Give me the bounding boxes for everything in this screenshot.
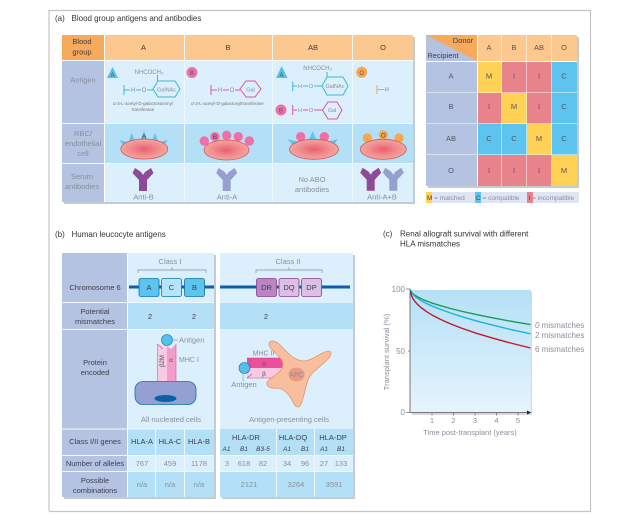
- curve: 6 mismatches: [410, 291, 530, 348]
- column headers: [141, 43, 386, 52]
- class II genes row: A1: [319, 446, 328, 453]
- antigen AB structure: A: [279, 73, 284, 79]
- row headers: antibodies: [65, 182, 99, 191]
- antibodies: Anti-A: [217, 192, 237, 202]
- axis labels: Time post-transplant (years): [423, 428, 517, 437]
- antigen AB structure: H: [298, 108, 302, 114]
- row headers: group: [72, 48, 92, 56]
- curve labels: 6 mismatches: [535, 345, 584, 354]
- rbc A: [119, 131, 168, 159]
- MHC I on nucleated cell: Antigen: [179, 336, 204, 344]
- antigen B structure: O: [230, 88, 235, 94]
- panel: compatibility matrix: C: [561, 102, 567, 111]
- panel a: blood group table: [62, 35, 415, 204]
- chromosome class II: Class II: [275, 257, 301, 266]
- class I genes row: [131, 437, 210, 489]
- class II genes row: 3: [225, 459, 229, 468]
- class I genes row: 459: [164, 459, 176, 468]
- row labels: Number of alleles: [66, 459, 124, 468]
- matrix legend: M = matched: [427, 195, 465, 202]
- rbc AB: [288, 131, 338, 159]
- chromosome class I: B: [192, 283, 197, 292]
- panel: compatibility matrix: I: [538, 72, 540, 80]
- class I genes row: 1178: [191, 459, 207, 468]
- class II genes row: B3-5: [256, 446, 270, 453]
- class II genes row: 618: [238, 459, 250, 468]
- axis labels: [382, 285, 520, 437]
- panel b: class I table: 2: [148, 312, 152, 321]
- row headers: RBC/: [74, 129, 93, 138]
- axis labels: 3: [473, 416, 477, 425]
- panel c heading: HLA mismatches: [400, 240, 460, 248]
- class II genes row: B1: [337, 446, 345, 453]
- matrix legend: I = incompatible: [528, 195, 575, 202]
- class II genes row: 3264: [288, 480, 304, 489]
- class II genes row: 34: [283, 459, 291, 468]
- row labels: Potential: [80, 307, 110, 316]
- axis labels: 100: [392, 285, 406, 294]
- class I genes row: n/a: [137, 480, 148, 489]
- curve: 0 mismatches: [410, 290, 530, 325]
- matrix corner: Recipient: [427, 51, 460, 60]
- panel: compatibility matrix: I: [538, 102, 540, 111]
- panel: compatibility matrix: M: [511, 102, 517, 111]
- chromosome class II: DR: [261, 283, 272, 292]
- rbc O: O: [381, 134, 386, 140]
- MHC I on nucleated cell: All nucleated cells: [141, 415, 201, 424]
- antigen B structure: B: [190, 71, 194, 77]
- antigen B structure: α-3-L-acetyl-D-galactosyltransferase: [191, 101, 264, 106]
- row headers: Serum: [71, 172, 93, 181]
- panel: compatibility matrix: B: [448, 102, 454, 111]
- class II genes row: HLA-DP: [319, 433, 347, 442]
- row headers: cell: [77, 149, 89, 158]
- axis labels: 4: [494, 416, 499, 425]
- chromosome class I: C: [169, 283, 175, 292]
- row labels: Protein: [83, 358, 107, 367]
- MHC II on antigen-presenting cell: [231, 341, 331, 424]
- matrix corner: [426, 35, 477, 61]
- panel a heading: Blood group antigens and antibodies: [72, 14, 201, 23]
- class II genes row: B1: [240, 446, 248, 453]
- chromosome class II: [220, 257, 350, 296]
- antigen A structure: [107, 67, 180, 112]
- antigen B structure: [186, 67, 264, 106]
- antigen B structure: H: [218, 88, 222, 94]
- panel: compatibility matrix: M: [536, 134, 542, 143]
- matrix corner: Donor: [453, 36, 474, 45]
- panel b: class II table: [220, 253, 355, 499]
- antigen AB structure: O: [309, 108, 314, 114]
- panel: compatibility matrix: A: [486, 43, 492, 52]
- antigen AB structure: O: [309, 84, 314, 90]
- antibodies: No ABO: [298, 175, 326, 184]
- class II genes row: 133: [335, 459, 347, 468]
- antigen A structure: NHCOCH₃: [135, 70, 164, 76]
- axis labels: 5: [516, 416, 520, 425]
- antigen O structure: O: [359, 71, 364, 77]
- panel: compatibility matrix: C: [561, 72, 567, 80]
- curve labels: [535, 321, 584, 354]
- antibodies: Anti-A+B: [367, 192, 397, 202]
- panel b: class I table: [62, 253, 216, 499]
- antigen A structure: H: [131, 88, 135, 94]
- class II genes row: 2121: [241, 480, 257, 489]
- class II genes row: 27: [320, 459, 328, 468]
- panel b heading: (b): [55, 230, 65, 239]
- column headers: O: [380, 43, 386, 52]
- axis labels: 50: [396, 347, 406, 356]
- panel: compatibility matrix: C: [511, 134, 517, 143]
- chromosome class II: DQ: [283, 283, 295, 292]
- panel: compatibility matrix: O: [561, 43, 567, 52]
- panel: compatibility matrix: [426, 35, 579, 188]
- axis labels: 0: [401, 408, 406, 417]
- class I genes row: HLA-A: [131, 437, 153, 446]
- axis labels: 2: [451, 416, 456, 425]
- row headers: Antigen: [70, 76, 96, 84]
- panel: compatibility matrix: I: [488, 166, 490, 175]
- class II genes row: HLA-DR: [232, 433, 261, 442]
- class II genes row: HLA-DQ: [279, 433, 307, 442]
- antigen AB structure: GalNAc: [326, 84, 345, 90]
- rbc O: [360, 130, 406, 159]
- panel: compatibility matrix: I: [513, 72, 515, 80]
- column headers: B: [225, 43, 231, 52]
- rbc B: [200, 131, 254, 160]
- curve labels: 0 mismatches: [535, 321, 584, 330]
- panel: compatibility matrix: B: [511, 43, 517, 52]
- antigen A structure: α-3-L-acetyl-D-galactosaminyl: [113, 101, 173, 106]
- row headers: [65, 37, 101, 191]
- panel: compatibility matrix: AB: [534, 43, 544, 52]
- row labels: Class I/II genes: [69, 437, 121, 446]
- antigen A structure: O: [142, 88, 147, 94]
- class II genes row: 96: [301, 459, 309, 468]
- class I genes row: HLA-C: [159, 437, 182, 446]
- panel: compatibility matrix: C: [561, 134, 567, 143]
- matrix legend: C = compatible: [476, 195, 520, 202]
- antigen A structure: transferase: [132, 107, 155, 112]
- MHC I on nucleated cell: β2M: [160, 355, 166, 367]
- antigen A structure: A: [110, 73, 115, 79]
- antigen B structure: Gal: [246, 88, 255, 94]
- curve labels: 2 mismatches: [535, 331, 584, 340]
- axis labels: 1: [430, 416, 434, 425]
- panel c heading: (c): [383, 230, 393, 238]
- class II genes row: 3591: [326, 480, 342, 489]
- antibodies: antibodies: [295, 185, 329, 194]
- panel c heading: Renal allograft survival with different: [400, 230, 529, 238]
- panel b: class I table: 2: [192, 312, 196, 321]
- panel c heading: [383, 230, 529, 248]
- class II genes row: A1: [282, 446, 291, 453]
- class I genes row: n/a: [165, 480, 176, 489]
- row labels: Possible: [81, 476, 109, 485]
- MHC II on antigen-presenting cell: MHC II: [253, 350, 274, 358]
- MHC II on antigen-presenting cell: Antigen: [231, 380, 257, 389]
- row labels: encoded: [81, 368, 109, 377]
- rbc B: B: [213, 134, 217, 141]
- antibodies: Anti-B: [133, 192, 154, 202]
- curve: 2 mismatches: [410, 290, 530, 334]
- MHC II on antigen-presenting cell: Antigen-presenting cells: [249, 415, 329, 424]
- MHC II on antigen-presenting cell: β: [262, 371, 266, 378]
- row labels: [66, 283, 124, 495]
- column headers: AB: [308, 43, 318, 52]
- chromosome class II: DP: [306, 283, 317, 292]
- panel b: class II table: 2: [264, 312, 268, 321]
- class II genes row: B1: [301, 446, 309, 453]
- class I genes row: HLA-B: [188, 437, 210, 446]
- MHC I on nucleated cell: [135, 334, 204, 424]
- chromosome class I: A: [146, 283, 152, 292]
- panel: compatibility matrix: I: [538, 166, 540, 175]
- class II genes row: [222, 433, 347, 489]
- rbc A: A: [142, 134, 147, 140]
- row labels: Chromosome 6: [69, 283, 121, 292]
- panel: compatibility matrix: I: [488, 102, 490, 111]
- panel: compatibility matrix: O: [448, 166, 454, 175]
- class I genes row: 767: [136, 459, 148, 468]
- panel: compatibility matrix: M: [561, 166, 567, 175]
- row labels: mismatches: [75, 317, 115, 326]
- antigen AB structure: NHCOCH₃: [303, 66, 333, 72]
- panel: compatibility matrix: C: [486, 134, 492, 143]
- matrix legend: [426, 192, 579, 203]
- MHC I on nucleated cell: MHC I: [179, 357, 199, 364]
- panel b heading: Human leucocyte antigens: [72, 230, 166, 239]
- axis labels: Transplant survival (%): [382, 313, 391, 390]
- antigen A structure: GalNAc: [157, 88, 176, 94]
- panel a heading: (a): [55, 14, 65, 23]
- survival line chart: [382, 285, 584, 437]
- antigen AB structure: [276, 66, 348, 119]
- antigen O structure: [356, 67, 389, 94]
- class I genes row: n/a: [194, 480, 205, 489]
- row headers: Blood: [72, 37, 92, 46]
- column headers: A: [141, 43, 146, 52]
- antigen AB structure: H: [298, 84, 302, 90]
- class II genes row: A1: [222, 446, 231, 453]
- MHC II on antigen-presenting cell: α: [262, 361, 266, 368]
- antibodies: [132, 168, 404, 202]
- panel: compatibility matrix: I: [513, 166, 515, 175]
- antigen O structure: H: [384, 88, 389, 94]
- panel: compatibility matrix: M: [486, 72, 492, 80]
- row headers: endothelial: [65, 139, 101, 148]
- class II genes row: 82: [259, 459, 267, 468]
- panel: compatibility matrix: AB: [446, 134, 456, 143]
- panel: compatibility matrix: A: [448, 72, 454, 80]
- antigen AB structure: B: [279, 108, 283, 114]
- MHC II on antigen-presenting cell: APC: [289, 372, 304, 379]
- chromosome class I: [129, 257, 214, 296]
- MHC I on nucleated cell: α: [169, 357, 173, 364]
- chromosome class I: Class I: [159, 257, 181, 266]
- antigen AB structure: Gal: [328, 108, 336, 114]
- row labels: combinations: [73, 486, 117, 495]
